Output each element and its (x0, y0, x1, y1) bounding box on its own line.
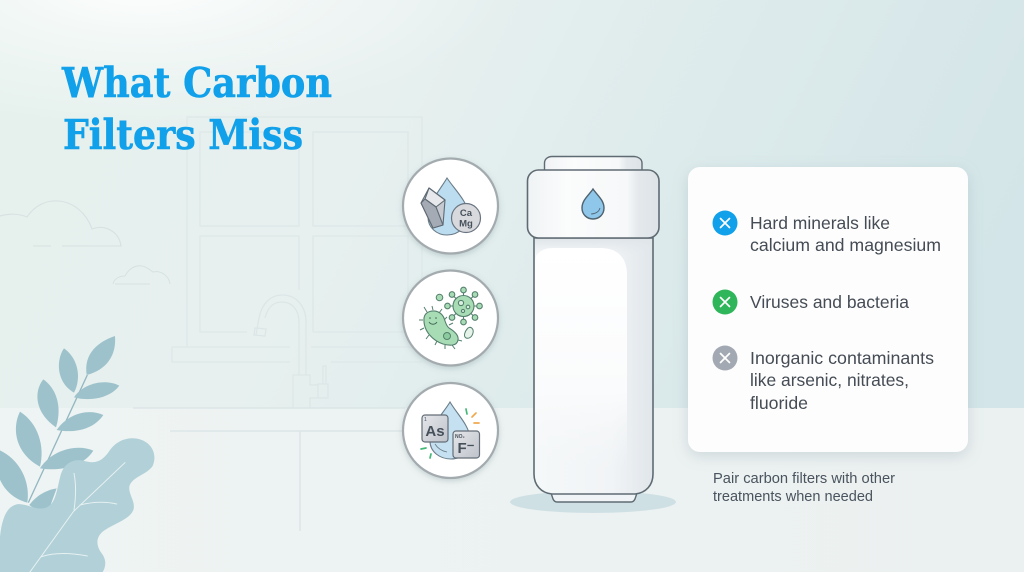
icon: hard minerals (403, 158, 498, 254)
crystal (421, 188, 445, 228)
cap (528, 170, 659, 238)
panel: what carbon filters miss (688, 167, 968, 452)
foot (551, 493, 637, 502)
plant (0, 336, 154, 572)
fluoride tile (453, 431, 480, 458)
item: hard minerals (712, 210, 941, 255)
icon: viruses and bacteria (403, 270, 498, 366)
water drop (428, 178, 468, 235)
title (61, 59, 332, 159)
fluoride tile: F⁻ (457, 440, 475, 457)
title: Filters Miss (63, 111, 303, 159)
body highlight (535, 248, 627, 470)
background wall (0, 0, 1024, 408)
icon: inorganic contaminants (403, 383, 498, 478)
caption: Pair carbon filters with other (713, 471, 895, 487)
item: viruses and bacteria: Viruses and bacteria (750, 292, 909, 312)
title: What Carbon (61, 59, 332, 107)
item: inorganic contaminants: Inorganic contaminants (750, 348, 934, 368)
fluoride tile: NO₂ (455, 434, 465, 440)
body top shade (535, 239, 652, 255)
kitchen window outline (172, 117, 422, 362)
water drop (430, 402, 470, 459)
item: hard minerals: calcium and magnesium (750, 235, 941, 255)
water drop logo (582, 189, 604, 219)
small spore (436, 294, 443, 301)
fern sprig (0, 336, 119, 509)
counter lines (133, 408, 405, 531)
item: inorganic contaminants (712, 346, 934, 413)
floor counter (0, 408, 1024, 572)
faucet outline (254, 295, 328, 408)
bacterium (419, 306, 462, 349)
cloud small (113, 266, 170, 284)
top collar (544, 156, 642, 171)
arsenic tile: As (425, 423, 445, 440)
sparks (421, 409, 479, 458)
water filter cartridge (528, 156, 659, 502)
filter shadow (510, 491, 676, 513)
large leaf (0, 438, 154, 572)
arsenic tile: 1 (424, 417, 427, 423)
caption: treatments when needed (713, 489, 873, 505)
cloud large (0, 201, 121, 246)
arsenic tile (422, 415, 448, 442)
calcium magnesium coin (452, 204, 480, 232)
small bacterium (465, 327, 473, 338)
virus (445, 287, 482, 325)
item: viruses and bacteria (712, 290, 909, 314)
item: hard minerals: Hard minerals like (750, 213, 890, 233)
calcium magnesium coin: Ca (460, 208, 473, 219)
body (534, 238, 653, 494)
item: inorganic contaminants: like arsenic, nitrates, (750, 370, 909, 390)
calcium magnesium coin: Mg (459, 218, 473, 230)
caption (713, 471, 895, 505)
item: inorganic contaminants: fluoride (750, 393, 808, 413)
